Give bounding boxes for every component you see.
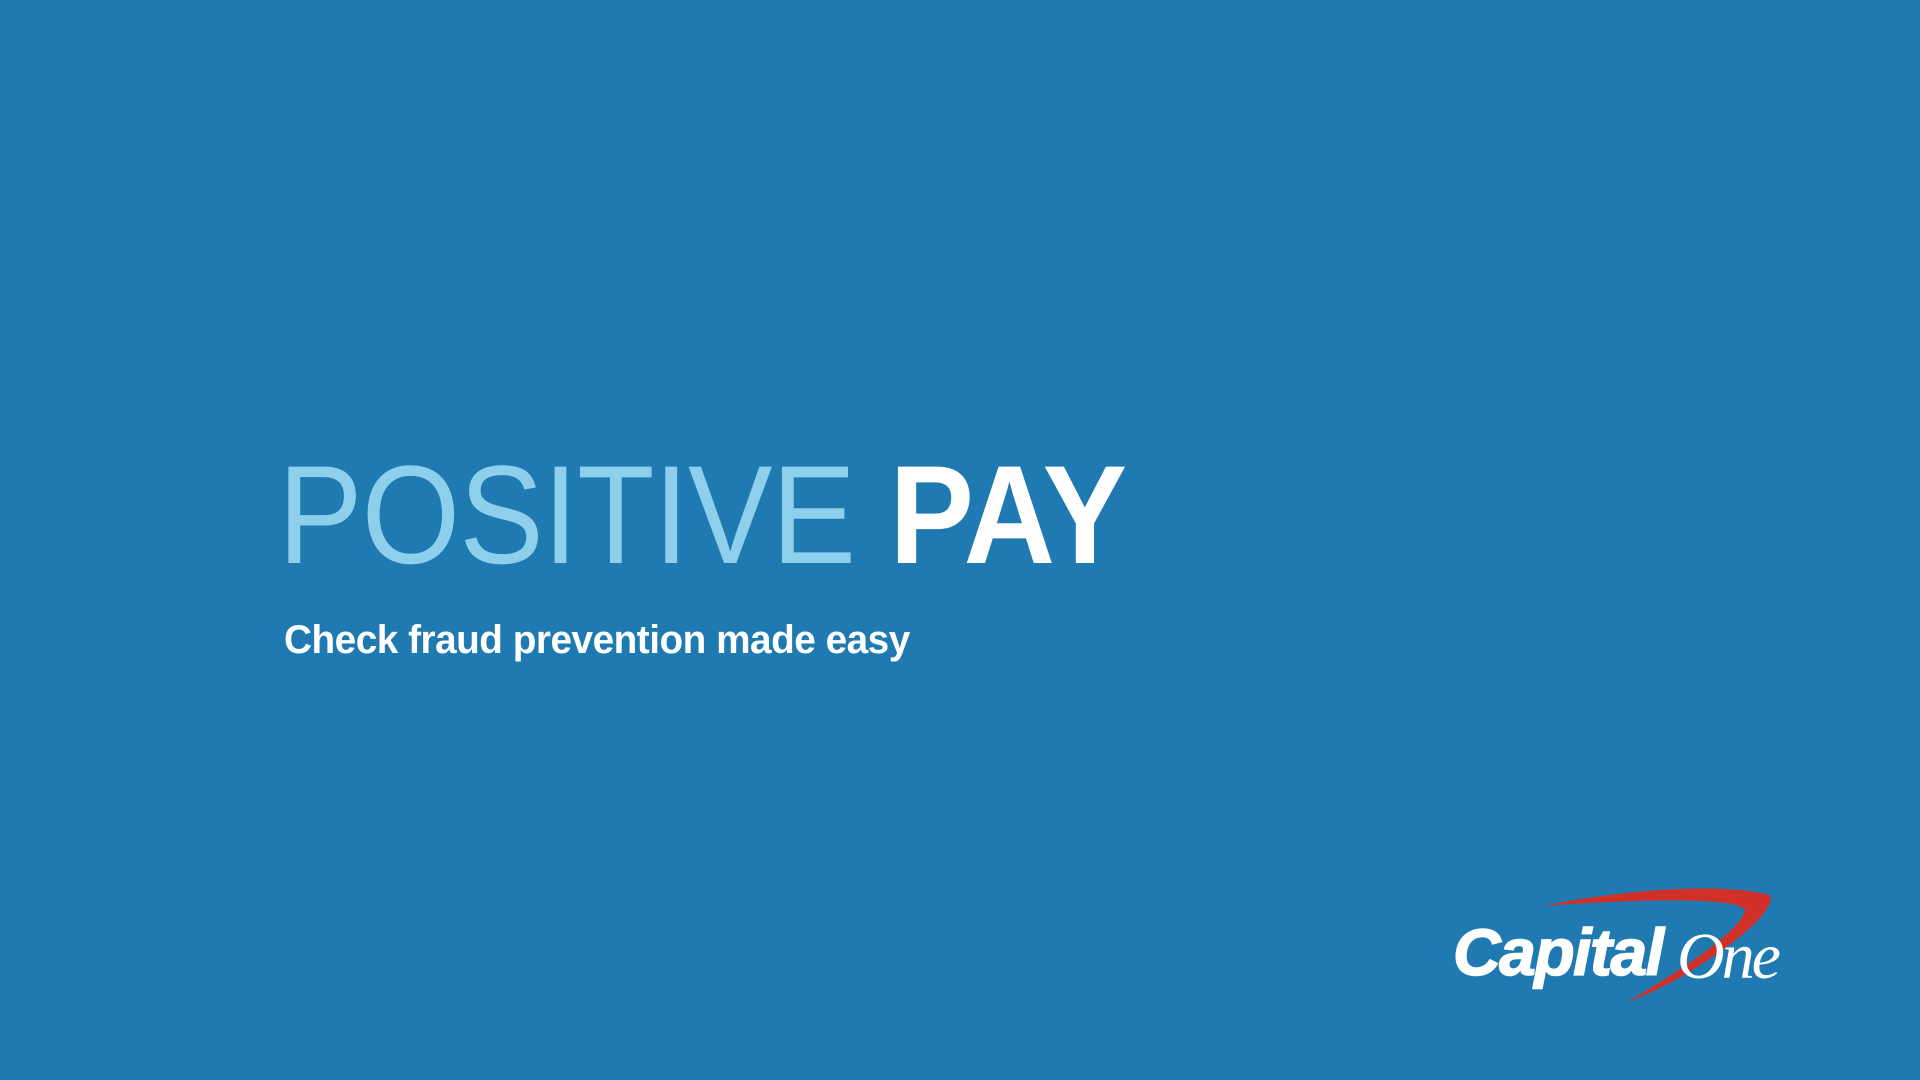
icon: red swoosh <box>1543 889 1771 1002</box>
title: POSITIVE PAY <box>278 436 1126 593</box>
logo: Capital One <box>1453 888 1780 1002</box>
subtitle: Check fraud prevention made easy <box>284 618 910 662</box>
logo text <box>1453 915 1780 993</box>
logo text: One <box>1677 920 1780 993</box>
logo text: Capital <box>1453 915 1666 989</box>
